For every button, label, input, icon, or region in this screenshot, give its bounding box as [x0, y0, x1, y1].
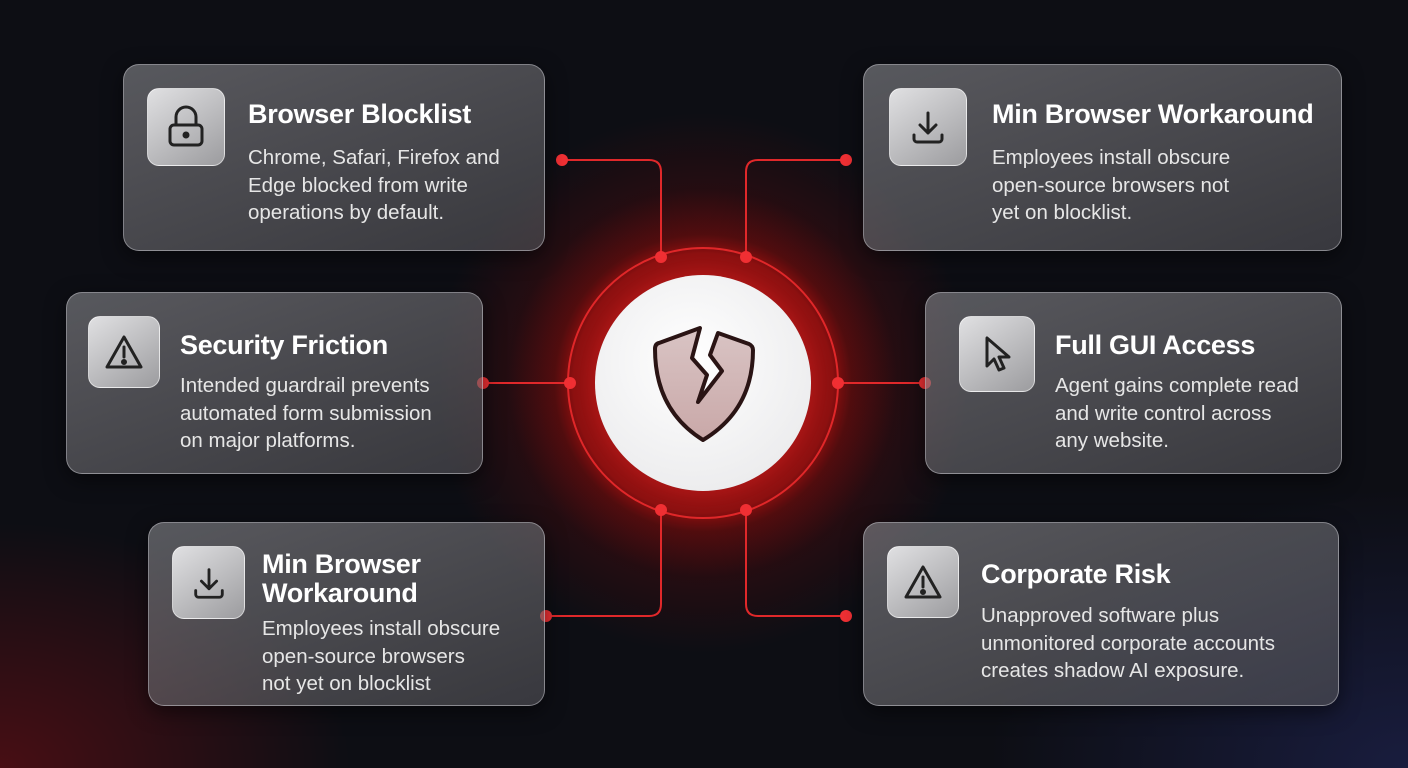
icon: download: [172, 546, 245, 619]
card: Browser Blocklist: Chrome, Safari, Firefox and: [248, 146, 500, 169]
card: Corporate Risk: Unapproved software plus: [981, 604, 1219, 627]
icon: lock: [147, 88, 225, 166]
card: Corporate Risk: [863, 522, 1339, 706]
card: Min Browser Workaround (top right): Min Browser Workaround: [992, 99, 1313, 129]
icon: cursor: [959, 316, 1035, 392]
card: Security Friction: Security Friction: [180, 330, 388, 360]
card: Min Browser Workaround (top right): Employees install obscure: [992, 146, 1230, 169]
card: Min Browser Workaround (bottom left): Min Browser: [262, 549, 421, 579]
card: Full GUI Access: and write control across: [1055, 402, 1271, 424]
card: Corporate Risk: unmonitored corporate accounts: [981, 632, 1275, 654]
card: Min Browser Workaround (bottom left): not yet on blocklist: [262, 672, 431, 695]
card: Browser Blocklist: [123, 64, 545, 251]
card: Full GUI Access: [925, 292, 1342, 474]
card: Full GUI Access: any website.: [1055, 429, 1169, 452]
card: Security Friction: [66, 292, 483, 474]
card: Browser Blocklist: Browser Blocklist: [248, 99, 471, 129]
card: Min Browser Workaround (bottom left): Workaround: [262, 578, 418, 608]
card: Min Browser Workaround (bottom left): open-source browsers: [262, 644, 465, 668]
card: Full GUI Access: Agent gains complete read: [1055, 374, 1299, 397]
card: Min Browser Workaround (top right): [863, 64, 1342, 251]
card: Min Browser Workaround (top right): yet on blocklist.: [992, 201, 1132, 224]
card: Corporate Risk: creates shadow AI exposure.: [981, 659, 1244, 682]
card: Browser Blocklist: operations by default.: [248, 201, 444, 224]
icon: warning: [88, 316, 160, 388]
icon: download: [889, 88, 967, 166]
card: Min Browser Workaround (top right): open-source browsers not: [992, 174, 1229, 196]
card: Full GUI Access: Full GUI Access: [1055, 330, 1255, 360]
card: Min Browser Workaround (bottom left): Employees install obscure: [262, 617, 500, 640]
card: Corporate Risk: Corporate Risk: [981, 559, 1170, 589]
card: Security Friction: Intended guardrail prevents: [180, 374, 430, 397]
card: Security Friction: on major platforms.: [180, 429, 355, 452]
card: Security Friction: automated form submission: [180, 402, 432, 424]
card: Browser Blocklist: Edge blocked from write: [248, 174, 468, 196]
center circle with broken shield icon: [595, 275, 811, 491]
card: Min Browser Workaround (bottom left): [148, 522, 545, 706]
icon: warning: [887, 546, 959, 618]
